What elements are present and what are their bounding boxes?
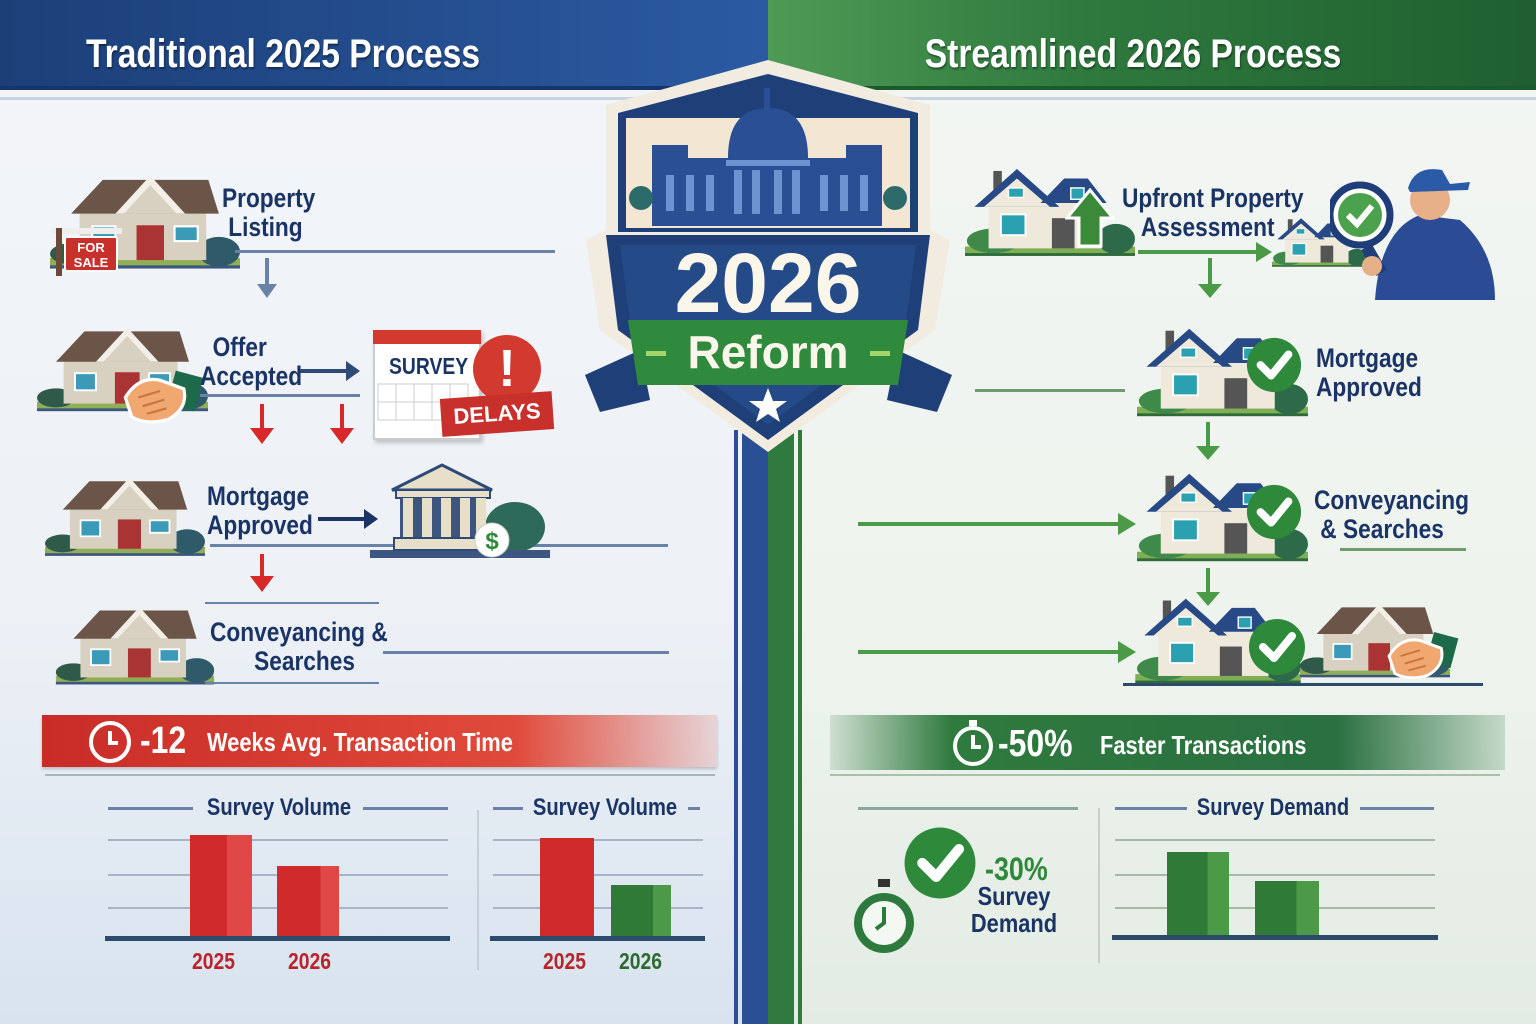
icon: bank: $ — [485, 528, 499, 555]
text — [207, 481, 313, 540]
icon: survey calendar delays — [373, 330, 554, 445]
right step 3: conveyancing — [858, 474, 1469, 606]
icon: survey calendar delays: SURVEY — [389, 353, 468, 379]
icon: clock — [89, 721, 131, 763]
banner: -12 weeks — [42, 715, 717, 767]
arrow down — [1196, 568, 1220, 606]
text: -30% — [985, 851, 1048, 887]
arrow down — [257, 258, 277, 298]
icon: survey calendar delays: ! — [498, 340, 516, 398]
icon: inspector — [1330, 169, 1495, 300]
divider stripes — [734, 430, 802, 1024]
text: Assessment — [1141, 212, 1275, 242]
text: Property — [222, 183, 315, 213]
icon: house handshake — [37, 328, 208, 412]
text: Searches — [254, 646, 355, 676]
text: Approved — [1316, 372, 1422, 402]
text: Mortgage — [207, 481, 309, 511]
bar 2025 — [190, 835, 252, 937]
chart: survey volume left — [105, 794, 450, 974]
chart: survey demand: Survey Demand — [1197, 794, 1349, 821]
background: left panel — [0, 0, 768, 1024]
text: Conveyancing & — [210, 617, 388, 647]
right step 4: completion — [855, 595, 1490, 690]
arrow right long — [858, 641, 1138, 663]
text — [200, 332, 302, 391]
header: left blue — [0, 0, 768, 90]
badge: 2026 reform shield — [580, 55, 960, 455]
icon: for sale sign: SALE — [74, 255, 108, 270]
arrow down — [1196, 422, 1220, 460]
icon: for sale sign — [52, 228, 122, 276]
badge: 2026 reform shield: Reform — [687, 326, 849, 378]
text — [210, 617, 388, 676]
icon: for sale sign: FOR — [77, 240, 105, 255]
bar 2025 — [540, 838, 594, 937]
chart: survey demand — [1112, 790, 1440, 950]
text: Conveyancing — [1314, 485, 1469, 515]
banner: -50% faster: -50% — [998, 723, 1073, 765]
ribbon tails — [585, 350, 650, 412]
text: Mortgage — [1316, 343, 1418, 373]
stat: -30% survey demand: Survey — [978, 881, 1050, 911]
left step 1: property listing — [50, 176, 555, 298]
icon: house — [56, 607, 214, 684]
text: & Searches — [1320, 514, 1444, 544]
arrow right — [318, 509, 378, 529]
chart: survey volume left: Survey Volume — [207, 794, 351, 821]
banner: -12 weeks: Weeks Avg. Transaction Time — [207, 727, 513, 757]
text: Offer — [213, 332, 267, 362]
bar 1 — [1167, 852, 1229, 937]
text — [1316, 343, 1422, 402]
icon: small house — [1272, 218, 1366, 267]
header: right green — [768, 0, 1536, 90]
text: Listing — [228, 212, 303, 242]
text: Accepted — [200, 361, 302, 391]
arrow red — [250, 554, 274, 592]
arrow down green — [1198, 258, 1222, 298]
right step 1: upfront assessment — [965, 169, 1495, 300]
banner: -12 weeks: -12 — [140, 720, 186, 762]
text: Upfront Property — [1122, 183, 1303, 213]
stat: -30% survey demand: Demand — [971, 908, 1057, 938]
banner: -50% faster — [830, 715, 1505, 770]
chart: survey volume right: 2026 — [619, 948, 662, 974]
bar 2026 — [611, 885, 671, 937]
icon: stopwatch — [850, 877, 920, 959]
title: traditional: Traditional 2025 Process — [86, 32, 480, 76]
icon: houses handshake — [1123, 595, 1313, 687]
background: right panel — [768, 0, 1536, 1024]
stat: -30% survey demand — [850, 805, 1080, 965]
icon: house — [45, 478, 205, 556]
bar 2 — [1255, 881, 1319, 937]
icon: house check — [1137, 328, 1308, 416]
chart: survey volume right — [490, 794, 705, 974]
arrow right — [300, 361, 360, 381]
left step 3: mortgage approved — [45, 463, 668, 592]
icon: bank — [370, 463, 550, 558]
chart: survey volume right: Survey Volume — [533, 794, 677, 821]
text — [1122, 183, 1304, 242]
left step 2: offer accepted — [37, 328, 554, 445]
chart: survey volume left: 2025 — [192, 948, 235, 974]
capitol — [652, 88, 882, 226]
arrow right long — [858, 513, 1136, 535]
icon: house with arrow — [965, 169, 1135, 256]
arrow right green — [1138, 242, 1272, 262]
icon: house check — [1137, 474, 1308, 562]
icon: check circle — [902, 825, 978, 901]
badge: 2026 reform shield: 2026 — [675, 236, 861, 330]
icon: survey calendar delays: DELAYS — [453, 398, 541, 429]
text — [1314, 485, 1469, 544]
banner: -50% faster: Faster Transactions — [1100, 730, 1306, 760]
icon: house for sale — [50, 176, 240, 269]
text: Approved — [207, 510, 313, 540]
right step 2: mortgage approved — [975, 328, 1422, 460]
arrows red — [250, 404, 354, 444]
title: streamlined: Streamlined 2026 Process — [925, 32, 1341, 76]
bar 2026 — [277, 866, 339, 937]
chart: survey volume right: 2025 — [543, 948, 586, 974]
chart: survey volume left: 2026 — [288, 948, 331, 974]
text — [222, 183, 316, 242]
left step 4: conveyancing — [56, 602, 669, 684]
icon: stopwatch — [950, 719, 996, 767]
